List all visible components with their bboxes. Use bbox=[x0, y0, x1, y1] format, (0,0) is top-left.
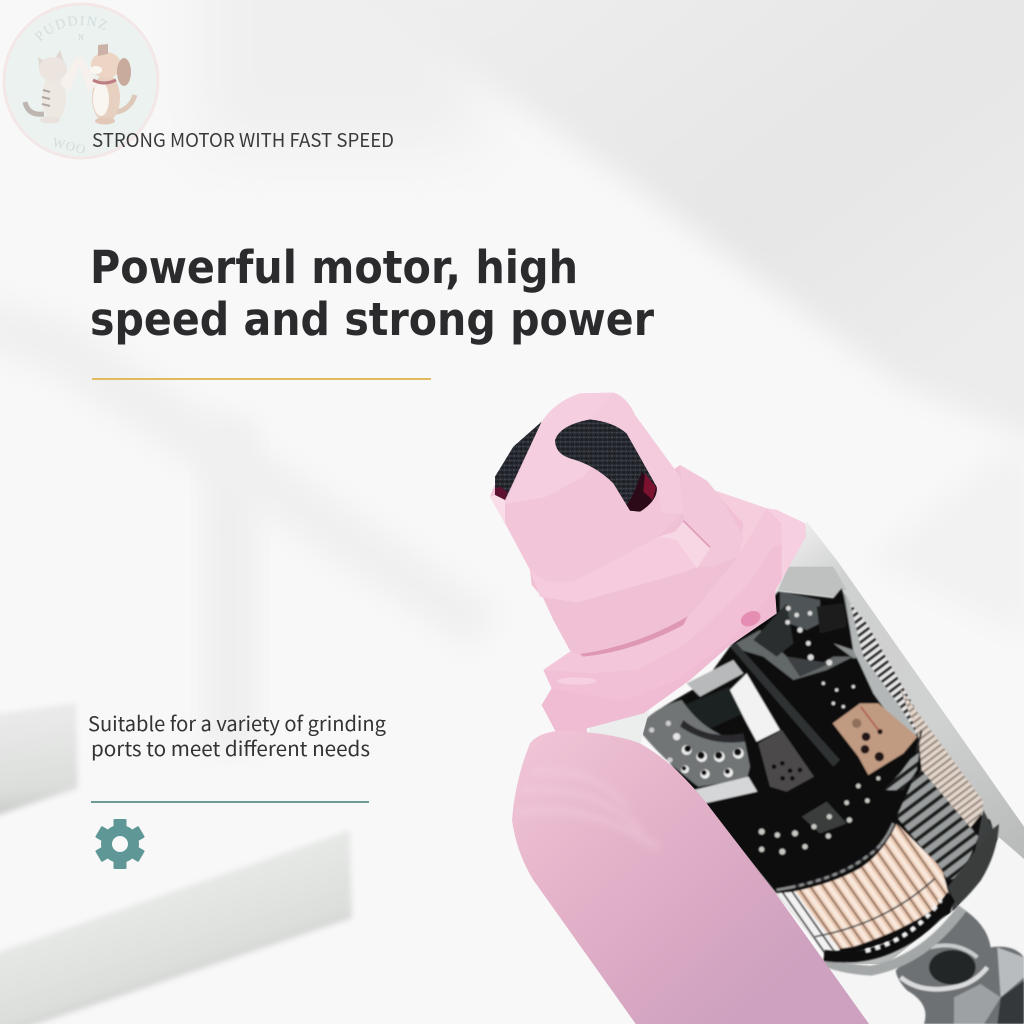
left grinding window bbox=[495, 422, 542, 500]
title: speed and strong power bbox=[90, 293, 655, 346]
icon: gear bbox=[95, 819, 145, 869]
transparent housing bbox=[687, 522, 1024, 964]
notch bbox=[658, 522, 710, 568]
dark mass bbox=[640, 588, 997, 960]
watermark logo: Puddinz N Woofz: N bbox=[78, 33, 84, 42]
description text: Suitable for a variety of grinding bbox=[88, 708, 386, 737]
nozzle body bbox=[490, 393, 683, 582]
top facet bbox=[505, 393, 630, 504]
icon: dog bbox=[77, 44, 135, 124]
description text bbox=[88, 708, 386, 762]
upper left gray bracket bbox=[780, 592, 820, 630]
watermark logo: Puddinz N Woofz bbox=[2, 2, 160, 160]
motor cutaway in transparent housing bbox=[640, 522, 1024, 964]
product: pink grinder with cutaway motor bbox=[490, 393, 1024, 1024]
watermark logo: Puddinz N Woofz: PUDDINZ bbox=[34, 16, 108, 42]
title bbox=[90, 241, 655, 346]
glass strip beside flange bbox=[587, 708, 650, 745]
rim bbox=[824, 908, 962, 971]
title: Powerful motor, high bbox=[90, 241, 578, 294]
lower perforated rotor bbox=[802, 802, 847, 833]
eyebrow text: STRONG MOTOR WITH FAST SPEED bbox=[92, 126, 394, 153]
icon: cat bbox=[25, 50, 82, 124]
upper copper winding bbox=[900, 688, 983, 830]
lower glass window, rim and shaft bbox=[824, 824, 1024, 1024]
pink grip body bbox=[512, 731, 873, 1024]
upper striped band bbox=[845, 593, 918, 740]
copper contact block bbox=[833, 703, 917, 775]
collar ring bbox=[530, 465, 743, 654]
pink flange bbox=[542, 490, 806, 747]
perforated drum bbox=[642, 700, 750, 787]
lower copper winding bbox=[793, 823, 950, 950]
watermark logo: Puddinz N Woofz: WOO bbox=[51, 134, 88, 157]
central shaft bbox=[730, 673, 780, 742]
description text: ports to meet different needs bbox=[91, 733, 370, 762]
shaft housing top bbox=[687, 660, 743, 697]
chrome shaft bbox=[896, 907, 1024, 1024]
pink nozzle and collar bbox=[490, 393, 743, 654]
main grinding window bbox=[555, 419, 657, 512]
